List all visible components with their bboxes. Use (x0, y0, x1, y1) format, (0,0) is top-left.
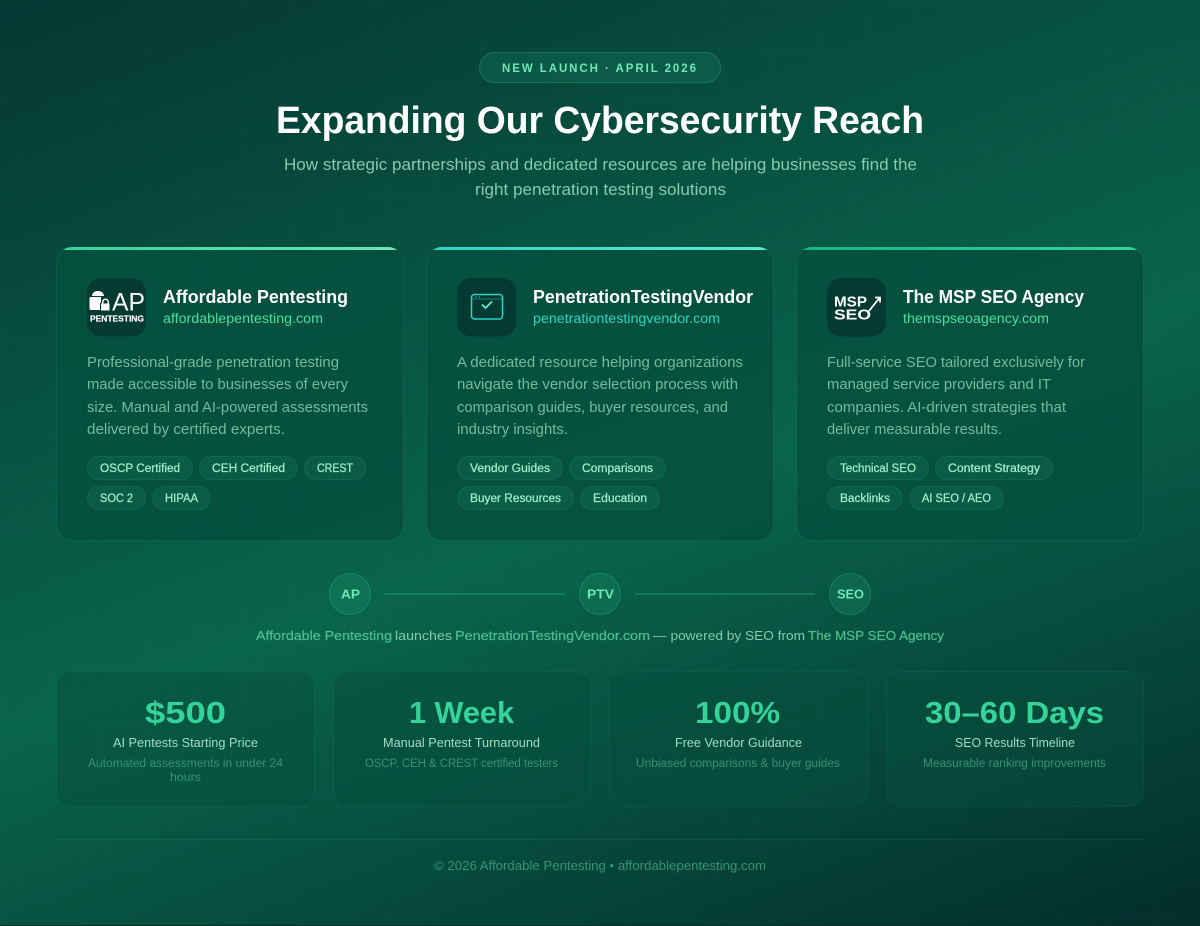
tags: CEH Certified (212, 463, 285, 475)
tags (88, 456, 366, 510)
stat: turnaround: Manual Pentest Turnaround (383, 736, 540, 750)
card description: A dedicated resource helping organizations (457, 355, 743, 371)
node: SEO (830, 574, 870, 614)
card description: industry insights. (457, 422, 568, 438)
tags: Backlinks (840, 493, 890, 505)
tags: Buyer Resources (470, 493, 561, 505)
card description: comparison guides, buyer resources, and (457, 400, 728, 416)
tags: CREST (317, 463, 353, 475)
stat: turnaround: OSCP, CEH & CREST certified testers (365, 758, 558, 770)
connector line (635, 593, 815, 595)
stat: starting price: hours (170, 772, 201, 784)
footer: © 2026 Affordable Pentesting • affordablepentesting.com (434, 859, 766, 873)
stat: starting price (56, 672, 314, 806)
card description: companies. AI-driven strategies that (827, 400, 1066, 416)
stat: SEO timeline (886, 672, 1144, 806)
tags: SOC 2 (100, 493, 133, 505)
stat: starting price: $500 (145, 695, 226, 730)
icon: browser window check (457, 278, 516, 336)
tags: Technical SEO (840, 463, 916, 475)
icon: MSP SEO logo (827, 278, 886, 336)
launch badge (480, 52, 720, 82)
stat: vendor guidance: 100% (695, 695, 780, 730)
subtitle: right penetration testing solutions (475, 181, 726, 199)
card name: PenetrationTestingVendor (533, 287, 753, 307)
card name: Affordable Pentesting (163, 287, 348, 307)
tags: AI SEO / AEO (922, 493, 991, 505)
stat: SEO timeline: Measurable ranking improvements (923, 758, 1106, 770)
card description: deliver measurable results. (827, 422, 1002, 438)
node: AP (330, 574, 370, 614)
card description: Full-service SEO tailored exclusively for (827, 355, 1085, 371)
node: SEO: SEO (837, 588, 864, 602)
launch badge: NEW LAUNCH · APRIL 2026 (502, 63, 696, 75)
tags: Comparisons (582, 463, 653, 475)
stat: starting price: Automated assessments in under 24 (88, 758, 284, 770)
flow caption (256, 628, 945, 643)
flow caption: — powered by SEO from (653, 628, 805, 643)
flow caption: The MSP SEO Agency (808, 628, 945, 643)
partnership flow diagram (330, 574, 870, 614)
stat: SEO timeline: SEO Results Timeline (955, 736, 1075, 750)
node: AP: AP (341, 588, 360, 602)
card url: themspseoagency.com (903, 311, 1049, 326)
card description (827, 355, 1085, 438)
stat: SEO timeline: 30–60 Days (925, 695, 1104, 730)
subtitle: How strategic partnerships and dedicated resources are helping businesses find the (284, 156, 917, 174)
node: PTV (580, 574, 620, 614)
stat: starting price: AI Pentests Starting Price (113, 736, 258, 750)
stat: vendor guidance (610, 672, 868, 806)
icon: AP Pentesting logo (87, 278, 146, 336)
connector line (385, 593, 565, 595)
card description: size. Manual and AI-powered assessments (87, 400, 368, 416)
accent bar (796, 247, 1144, 250)
card url: affordablepentesting.com (163, 311, 323, 326)
card description: made accessible to businesses of every (87, 377, 349, 393)
card url: penetrationtestingvendor.com (533, 311, 720, 326)
title: Expanding Our Cybersecurity Reach (276, 100, 924, 142)
tags (828, 456, 1052, 510)
accent bar (426, 247, 774, 250)
card description: managed service providers and IT (827, 377, 1051, 393)
stat: vendor guidance: Free Vendor Guidance (675, 736, 802, 750)
panel: The MSP SEO Agency (796, 247, 1144, 540)
tags: OSCP Certified (100, 463, 180, 475)
flow caption: launches (395, 628, 453, 643)
accent bar (56, 247, 404, 250)
flow caption: Affordable Pentesting (256, 628, 392, 643)
card name: The MSP SEO Agency (903, 287, 1084, 307)
icon: AP Pentesting logo: AP (112, 288, 145, 316)
icon: MSP SEO logo: MSP (834, 294, 867, 310)
card description: navigate the vendor selection process with (457, 377, 738, 393)
tags: Education (593, 493, 647, 505)
icon: MSP SEO logo: SEO (834, 308, 871, 324)
subtitle (284, 156, 917, 199)
card description (87, 355, 368, 438)
flow caption: PenetrationTestingVendor.com (455, 628, 650, 643)
panel: PenetrationTestingVendor (426, 247, 774, 540)
icon: AP Pentesting logo: PENTESTING (90, 314, 144, 324)
card description: Professional-grade penetration testing (87, 355, 339, 371)
stat: turnaround (334, 672, 590, 806)
tags: Content Strategy (948, 463, 1040, 475)
tags: Vendor Guides (470, 463, 550, 475)
tags: HIPAA (165, 493, 198, 505)
stat: turnaround: 1 Week (409, 695, 515, 730)
panel: Affordable Pentesting (56, 247, 404, 540)
card description: delivered by certified experts. (87, 422, 285, 438)
node: PTV: PTV (587, 588, 615, 602)
tags (458, 456, 666, 510)
stat: vendor guidance: Unbiased comparisons & buyer guides (636, 758, 840, 770)
card description (457, 355, 743, 438)
